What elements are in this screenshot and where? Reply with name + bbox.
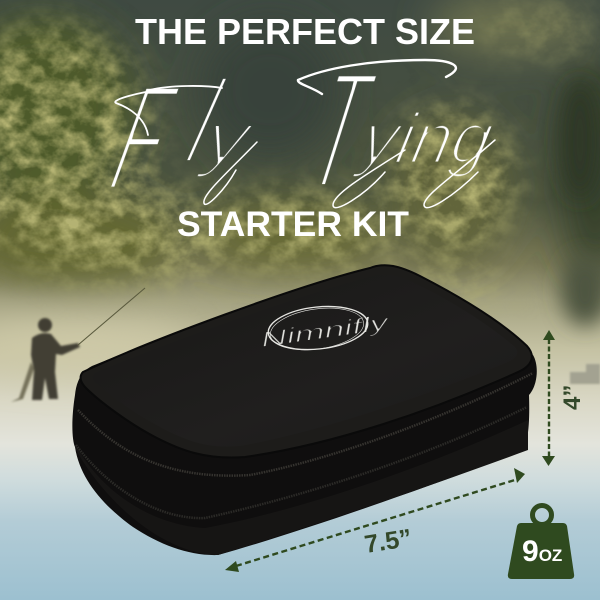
fisherman silhouette: [11, 318, 80, 402]
case body silhouette: [72, 266, 537, 555]
height label: 4”: [559, 385, 586, 410]
distant boat: [570, 364, 600, 384]
width label: 7.5”: [363, 524, 414, 559]
script title: Fly Tying: ying: [350, 99, 500, 179]
title line 3: STARTER KIT: [177, 205, 409, 244]
brand name: Nimnifly: [259, 311, 392, 352]
weight icon: [508, 506, 574, 579]
height arrow: [542, 330, 555, 466]
width arrow: [225, 468, 525, 572]
title line 1: THE PERFECT SIZE: [135, 11, 475, 52]
black zip case: [72, 265, 537, 555]
upper zip: [78, 373, 533, 476]
top panel piping: [81, 265, 532, 458]
script title: Fly Tying: T: [296, 35, 388, 224]
descender flourishes: [204, 140, 495, 208]
foliage texture: [0, 0, 600, 320]
script title: Fly Tying: [97, 35, 500, 224]
script title: Fly Tying: l: [175, 54, 237, 189]
weight label: 9OZ: [522, 535, 562, 568]
middle zip: [76, 407, 527, 518]
script swash of the F: [115, 86, 222, 135]
top panel fabric: [93, 274, 517, 447]
script title: Fly Tying: F: [97, 52, 191, 222]
brand logo: [259, 302, 392, 355]
lower zip band: [76, 420, 528, 555]
fishing rod: [78, 288, 145, 345]
script swash of the T: [298, 60, 456, 94]
script title: Fly Tying: y: [194, 98, 261, 178]
